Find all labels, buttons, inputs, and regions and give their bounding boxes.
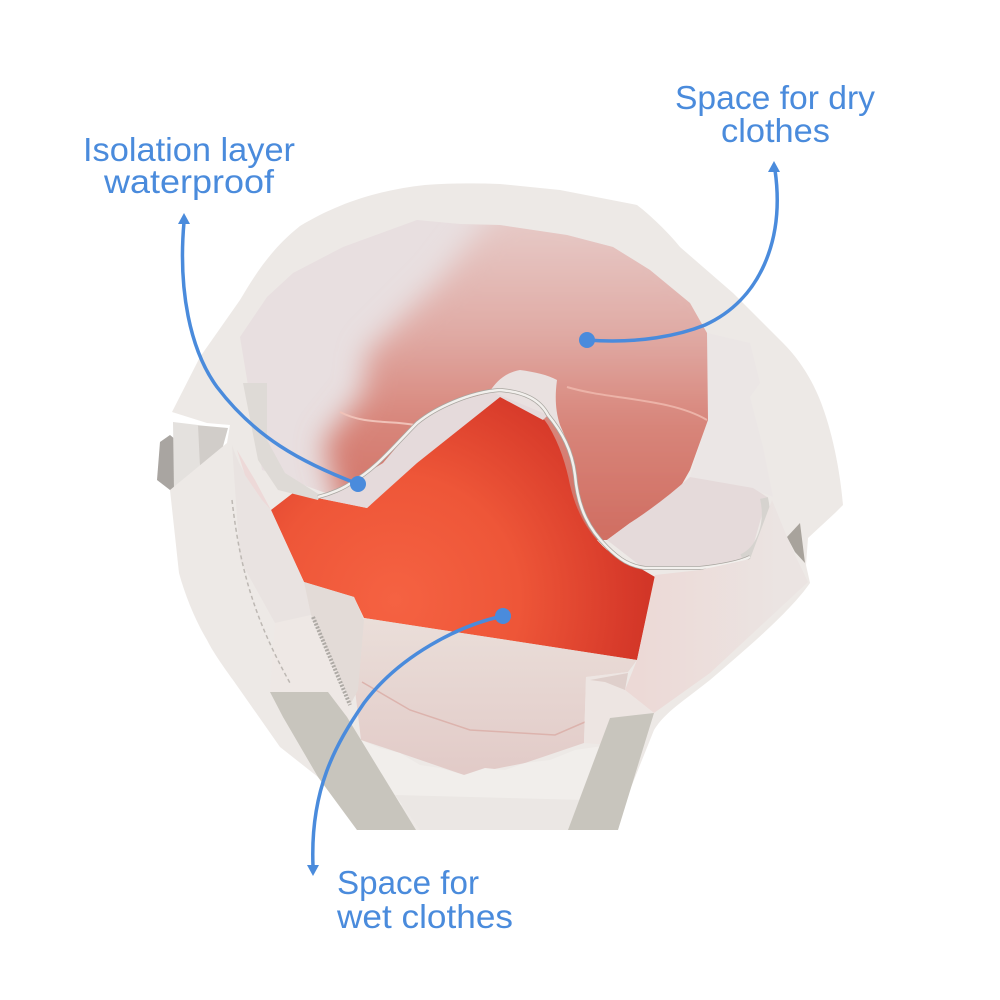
- pink lining strip: [237, 450, 271, 510]
- heading: isolation layer: [83, 131, 295, 200]
- infographic: [86, 85, 875, 928]
- hump: [490, 370, 572, 453]
- outer shell: [170, 183, 843, 830]
- floor seam: [362, 682, 585, 735]
- left flap: [258, 390, 548, 508]
- right flap: [607, 477, 767, 568]
- right lower wall: [625, 500, 808, 713]
- callout: dry clothes: [579, 79, 876, 348]
- front rim: [361, 740, 610, 805]
- heading: wet clothes: Space for: [337, 864, 479, 901]
- arrow: isolation layer: [178, 213, 366, 492]
- isolation layer flap: [243, 370, 767, 568]
- heading: dry clothes: clothes: [721, 112, 830, 149]
- drawcord: [318, 390, 750, 568]
- callout: isolation layer: [83, 131, 366, 492]
- inner strap: [243, 383, 320, 500]
- left inner panel: [232, 445, 311, 623]
- flap zipper band: [742, 498, 766, 558]
- heading: isolation layer: waterproof: [103, 163, 275, 200]
- bag: [157, 183, 843, 830]
- dry compartment: [240, 220, 708, 540]
- heading: isolation layer: Isolation layer: [83, 131, 295, 168]
- arrow: dry clothes: [579, 161, 780, 348]
- heading: dry clothes: [675, 79, 876, 149]
- red compartment: wet clothes: [271, 397, 655, 660]
- heading: wet clothes: wet clothes: [336, 898, 513, 935]
- right inner wall: [690, 333, 773, 497]
- pink back wall: [308, 224, 708, 540]
- lining base: [240, 220, 708, 540]
- right pocket: [584, 672, 654, 745]
- right strap: [568, 713, 654, 830]
- arrow: wet clothes: [307, 608, 511, 876]
- heading: wet clothes: [336, 864, 513, 935]
- floor of wet compartment: [355, 618, 637, 775]
- gap behind side zipper: [787, 523, 805, 563]
- callout: wet clothes: [307, 608, 513, 935]
- left pocket: [232, 500, 364, 725]
- buckle and webbing: [157, 422, 228, 492]
- heading: dry clothes: Space for dry: [675, 79, 876, 116]
- left strap: [270, 692, 416, 830]
- floor crease: [567, 387, 707, 420]
